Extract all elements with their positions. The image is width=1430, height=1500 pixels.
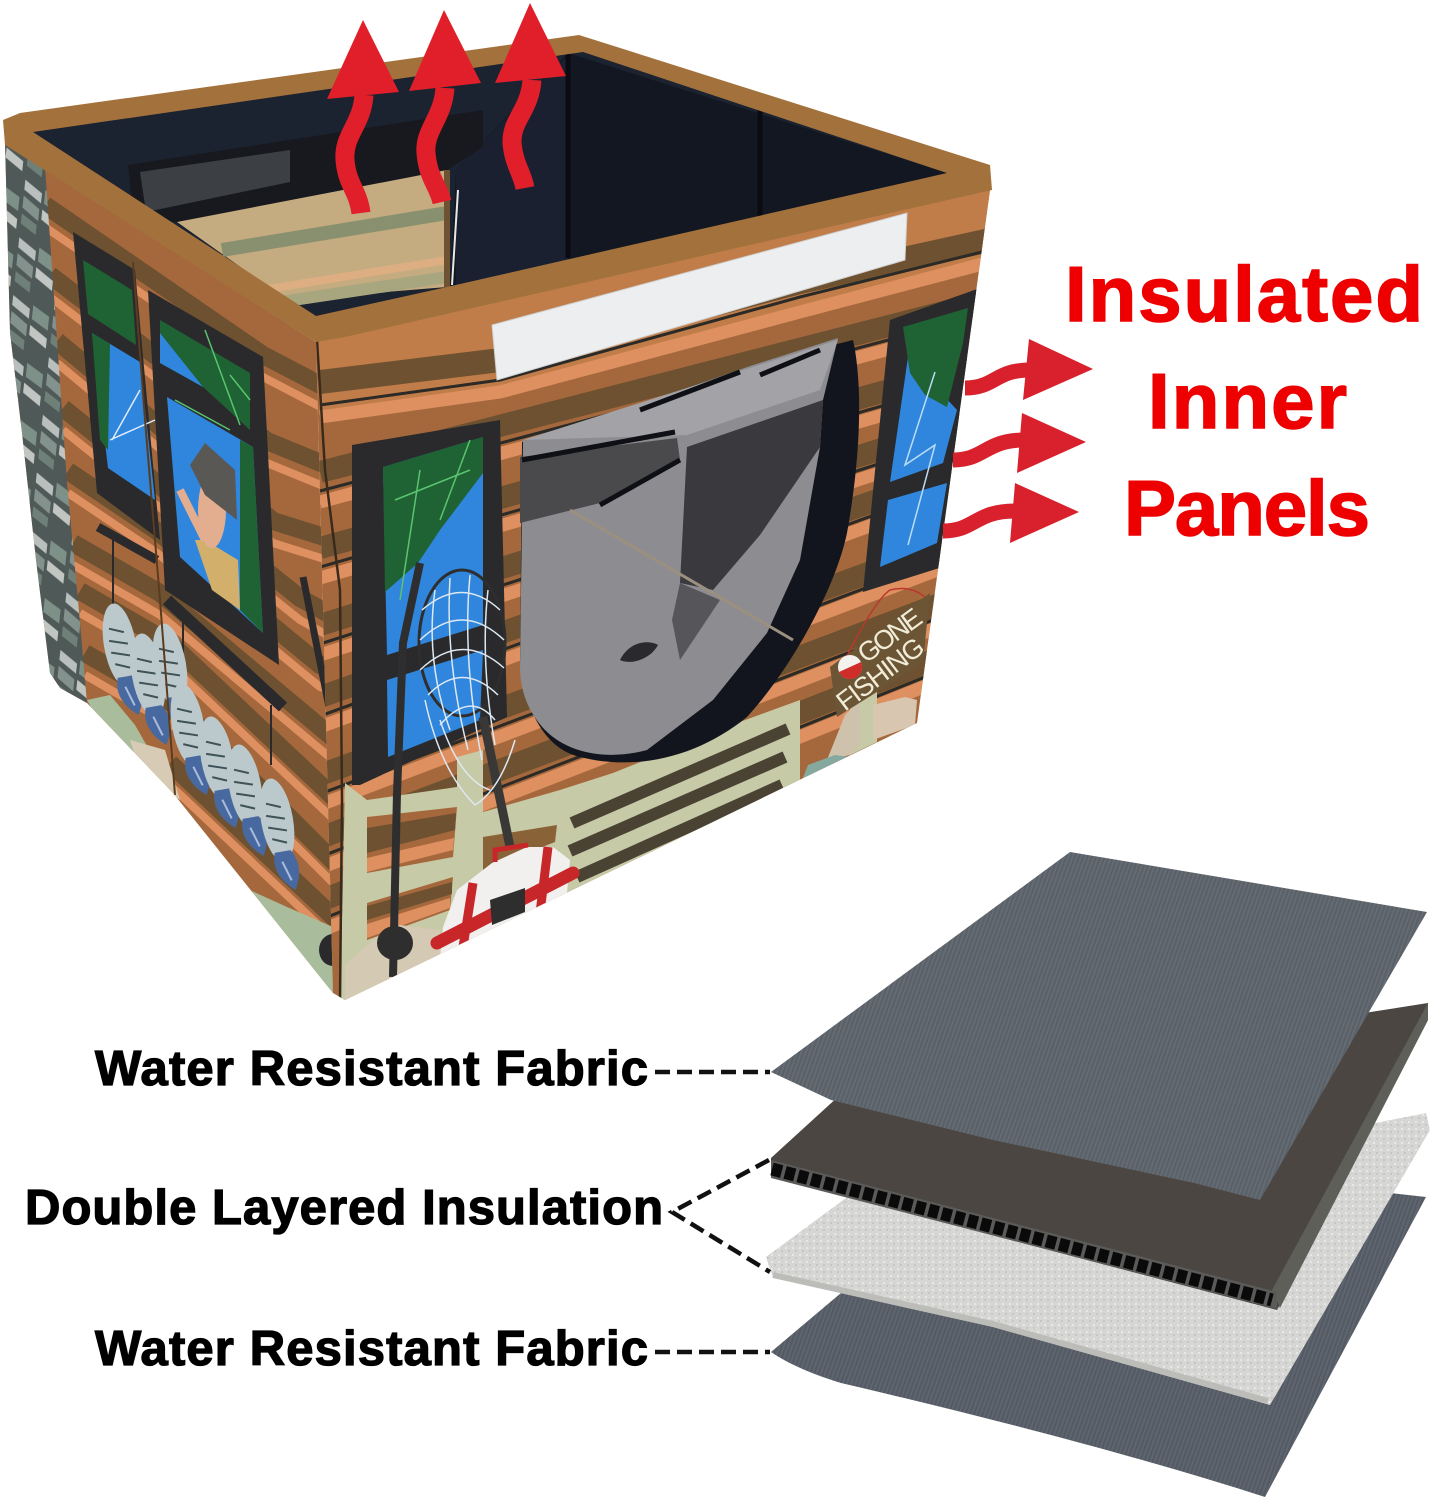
ground rocks left: [87, 695, 340, 1000]
back window: [73, 232, 160, 540]
arrow: heat right 1: [965, 339, 1093, 400]
layer: bottom fabric: [771, 1193, 1426, 1497]
gone fishing sign: FISHING: [831, 631, 930, 717]
right front window: [863, 288, 980, 592]
fishing rod left: [300, 576, 332, 966]
front face: [310, 190, 1000, 1010]
heading: insulated inner panels: Inner: [1148, 357, 1347, 445]
arrow: heat right 2: [953, 413, 1086, 473]
left front window: [352, 420, 507, 785]
box rim: [3, 35, 992, 342]
layer: top fabric: [771, 852, 1427, 1200]
landing net: [419, 570, 515, 847]
fishing rod: [377, 563, 420, 977]
tan interior panel: [177, 170, 458, 302]
log stripes: [320, 240, 990, 931]
velcro strip: [492, 213, 907, 380]
arrow: heat up 3: [495, 3, 566, 188]
life ring cooler: [437, 845, 573, 958]
cabin window with fisherman: [148, 290, 279, 665]
layer: foam insulation: [766, 1113, 1430, 1405]
hanging fish: [97, 601, 305, 894]
label: water resistant fabric bottom: Water Resistant Fabric: [95, 1322, 648, 1376]
heat arrows right: [943, 339, 1093, 543]
porch railing: [340, 690, 917, 1010]
box interior: [10, 45, 960, 335]
label: double layered insulation: Double Layered Insulation: [25, 1181, 663, 1235]
heading: insulated inner panels: Insulated: [1065, 250, 1423, 338]
heat arrows up: [327, 3, 566, 213]
hanging rack: [98, 527, 283, 765]
left face: [0, 130, 350, 1010]
arrow: heat right 3: [943, 483, 1079, 543]
gone fishing sign: GONE: [852, 602, 928, 669]
heading: insulated inner panels: [1065, 250, 1423, 552]
gone fishing sign: [830, 589, 930, 717]
stone chimney: [5, 145, 87, 703]
heading: insulated inner panels: Panels: [1124, 464, 1370, 552]
layer: corrugated insulation: [771, 1003, 1428, 1310]
label: double layered insulation: [25, 1160, 770, 1272]
arrow: heat up 1: [327, 20, 399, 213]
label: water resistant fabric top: Water Resistant Fabric: [95, 1042, 648, 1096]
storage box: [0, 35, 1000, 1010]
clear vinyl window: [520, 338, 859, 762]
arrow: heat up 2: [409, 10, 481, 202]
fisherman figure: [180, 443, 240, 610]
